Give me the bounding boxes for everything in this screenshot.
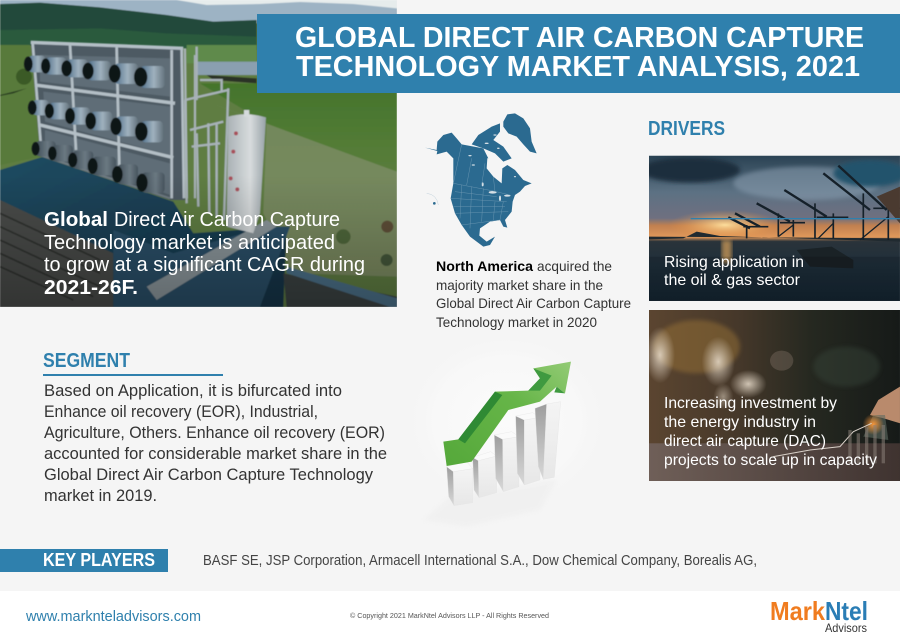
logo: MarkNtel Advisors: Mark <box>770 596 825 626</box>
driver text: energy investment: direct air capture (DAC) <box>664 433 826 450</box>
text: North America share <box>436 258 631 330</box>
heading: segment: SEGMENT <box>43 350 130 372</box>
photo caption text: 2021-26F. <box>44 277 138 299</box>
title banner: GLOBAL DIRECT AIR CARBON CAPTURE <box>295 22 864 54</box>
copyright: © Copyright 2021 MarkNtel Advisors LLP - All Rights Reserved <box>350 611 549 620</box>
footer <box>0 591 900 638</box>
logo: MarkNtel Advisors: Ntel <box>825 596 868 626</box>
icon: growth bar chart with green arrow <box>403 340 610 527</box>
text: segment description <box>44 382 387 505</box>
title banner: TECHNOLOGY MARKET ANALYSIS, 2021 <box>296 51 860 83</box>
text: segment description: market in 2019. <box>44 487 157 505</box>
text: segment description: Agriculture, Others. Enhance oil recovery (EOR) <box>44 424 385 442</box>
photo caption text <box>44 209 365 299</box>
photo panel: direct air capture plant <box>0 0 397 307</box>
capture rack with fans <box>24 42 195 200</box>
text: North America share: majority market share in the <box>436 277 603 293</box>
text: key players list: BASF SE, JSP Corporation, Armacell International S.A., Dow Chemical Company, Borealis AG, <box>203 553 757 569</box>
driver text: energy investment: the energy industry in <box>664 414 816 431</box>
photo caption text: Global <box>44 209 108 231</box>
driver text: oil and gas <box>664 254 804 289</box>
text: North America share: North America <box>436 258 533 274</box>
text: North America share: Technology market in 2020 <box>436 314 597 330</box>
title banner <box>257 14 900 93</box>
icon: North America map <box>425 113 537 247</box>
text: segment description: Global Direct Air Carbon Capture Technology <box>44 466 374 484</box>
driver text: energy investment <box>664 395 877 469</box>
text: North America share: Global Direct Air Carbon Capture <box>436 295 631 311</box>
key players label <box>0 549 168 572</box>
logo: MarkNtel Advisors: Advisors <box>825 621 867 635</box>
driver text: oil and gas: the oil & gas sector <box>664 272 801 289</box>
photo caption text: Technology market is anticipated <box>44 232 335 254</box>
text: North America share: acquired the <box>537 258 612 274</box>
text: segment description: Enhance oil recovery (EOR), Industrial, <box>44 403 318 421</box>
photo caption text: to grow at a significant CAGR during <box>44 254 365 276</box>
logo: MarkNtel Advisors <box>770 596 868 635</box>
driver card: energy investment <box>645 310 900 481</box>
text: segment description: Based on Application, it is bifurcated into <box>44 382 342 400</box>
photo shade <box>0 175 397 307</box>
driver card: oil and gas <box>640 156 900 301</box>
driver text: energy investment: Increasing investment by <box>664 395 837 412</box>
key players label: KEY PLAYERS <box>43 550 155 570</box>
heading: drivers: DRIVERS <box>648 118 725 140</box>
text: segment description: accounted for considerable market share in the <box>44 445 387 463</box>
driver text: oil and gas: Rising application in <box>664 254 804 271</box>
website link text: www.marknteladvisors.com <box>25 608 201 625</box>
driver text: energy investment: projects to scale up in capacity <box>664 452 877 469</box>
photo caption text: Direct Air Carbon Capture <box>114 209 340 231</box>
